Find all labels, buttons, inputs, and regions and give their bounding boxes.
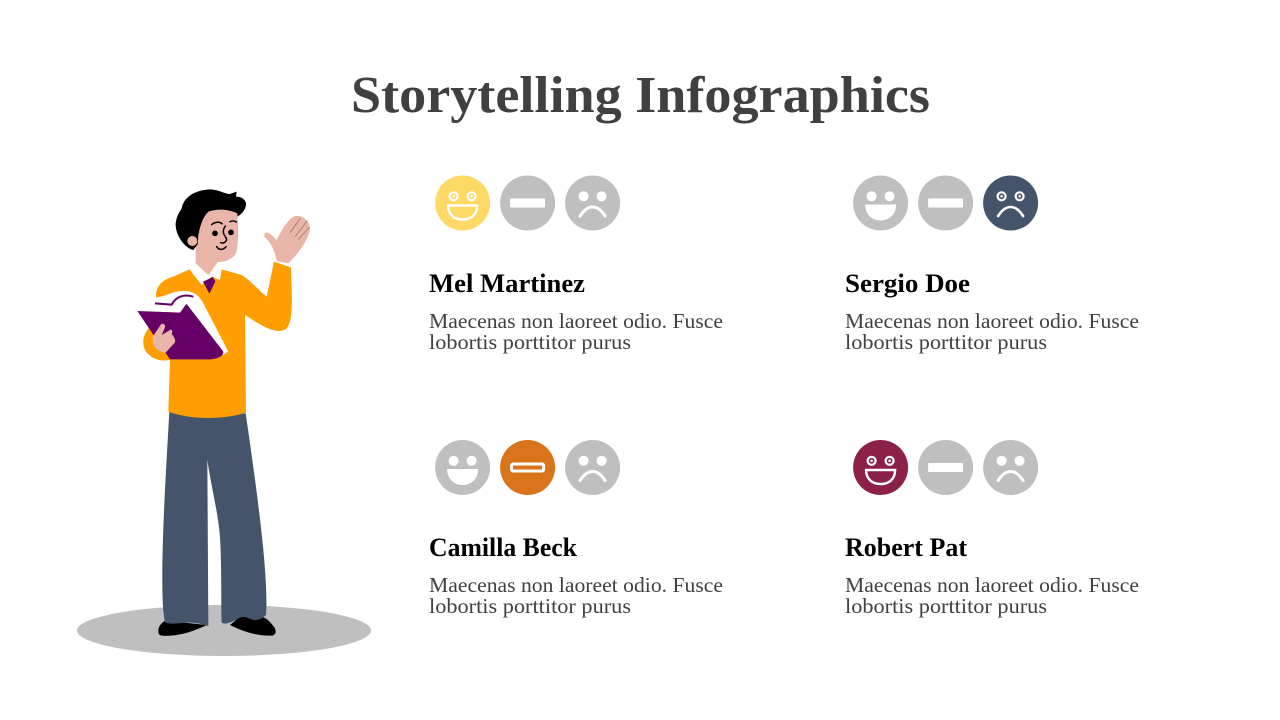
book pages: [137, 291, 228, 355]
icon: neutral face, orange: [500, 440, 555, 495]
description: lobortis porttitor purus: [429, 594, 631, 618]
description: Maecenas non laoreet odio. Fusce: [845, 573, 1139, 597]
description: [429, 573, 723, 618]
description: [429, 309, 723, 354]
panel: Camilla Beck: [429, 440, 723, 618]
tie: [203, 277, 215, 294]
book bookmark: [155, 295, 193, 305]
description: [845, 573, 1139, 618]
icon: neutral face, gray: [918, 176, 973, 230]
description: Maecenas non laoreet odio. Fusce: [429, 309, 723, 333]
panel: Mel Martinez: [429, 176, 723, 354]
name: Sergio Doe: [845, 269, 970, 298]
legs and shoes: [158, 412, 276, 636]
icon: happy face, maroon: [853, 440, 908, 495]
name: Robert Pat: [845, 533, 967, 562]
illustration: man reading a book: [77, 189, 371, 656]
rating icons: happy selected: [435, 176, 620, 230]
description: Maecenas non laoreet odio. Fusce: [429, 573, 723, 597]
name: Mel Martinez: [429, 269, 585, 298]
description: lobortis porttitor purus: [845, 594, 1047, 618]
description: lobortis porttitor purus: [429, 330, 631, 354]
ground shadow: [77, 605, 371, 656]
sweater: [143, 262, 292, 418]
icon: happy face, gray: [853, 176, 908, 230]
icon: sad face, gray: [983, 440, 1038, 495]
panel: Sergio Doe: [845, 176, 1139, 354]
title: Storytelling Infographics: [351, 67, 930, 124]
description: Maecenas non laoreet odio. Fusce: [845, 309, 1139, 333]
hair back: [176, 189, 246, 250]
book cover: [137, 304, 223, 359]
description: lobortis porttitor purus: [845, 330, 1047, 354]
icon: neutral face, gray: [918, 440, 973, 495]
face: [197, 210, 238, 262]
rating icons: neutral selected: [435, 440, 620, 495]
torso, arms and head: [137, 189, 310, 418]
icon: happy face, yellow: [435, 176, 490, 230]
icon: sad face, gray: [565, 176, 620, 230]
holding hand: [153, 324, 175, 353]
rating icons: sad selected: [853, 176, 1038, 230]
icon: sad face, navy: [983, 176, 1038, 230]
panel: Robert Pat: [845, 440, 1139, 618]
rating icons: happy selected: [853, 440, 1038, 495]
icon: neutral face, gray: [500, 176, 555, 230]
neck: [196, 243, 219, 275]
facial features: [212, 230, 218, 236]
name: Camilla Beck: [429, 533, 578, 562]
icon: happy face, gray: [435, 440, 490, 495]
raised hand: [264, 216, 310, 263]
collar: [189, 262, 222, 285]
icon: sad face, gray: [565, 440, 620, 495]
description: [845, 309, 1139, 354]
ear: [187, 236, 197, 246]
